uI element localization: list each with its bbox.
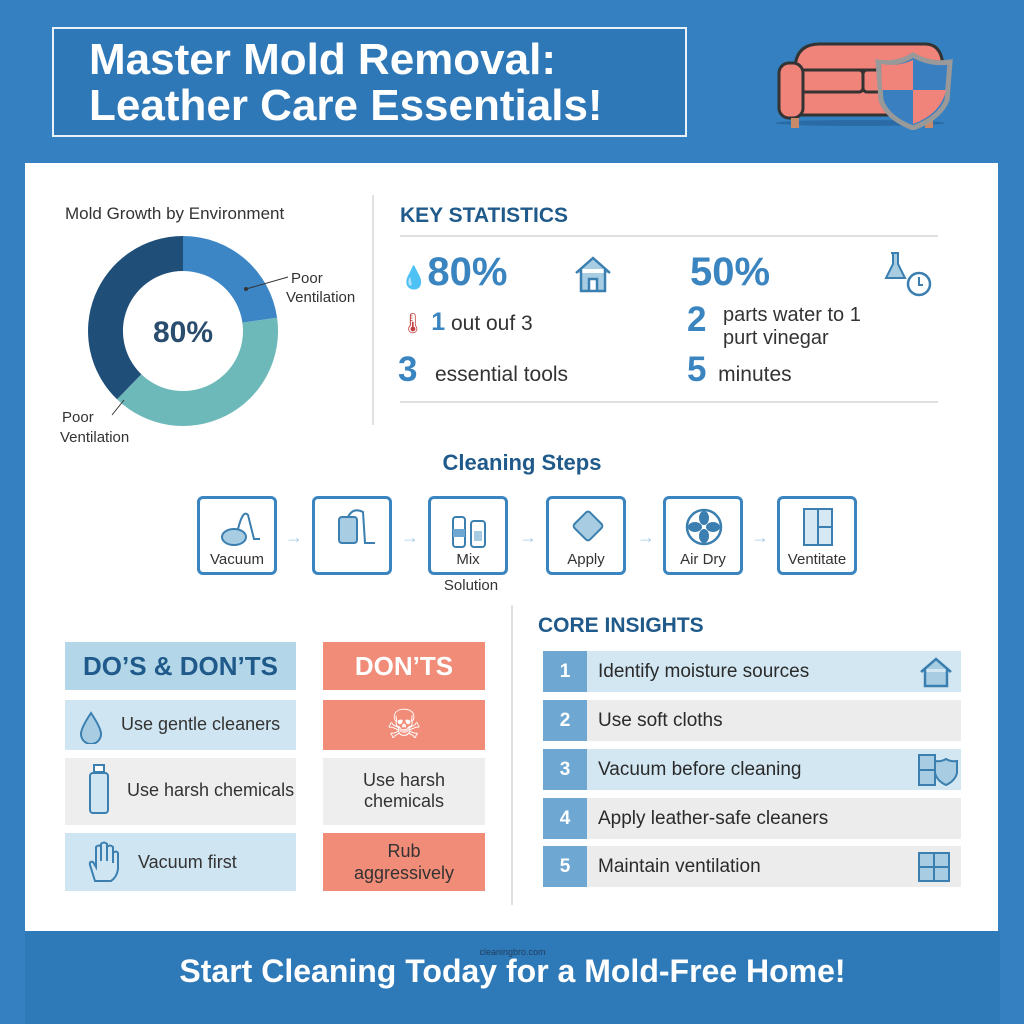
text: → [751,527,769,547]
donut chart [60,236,355,446]
step: apply [546,496,626,575]
insight 3 [543,749,961,790]
dont: rub: Rub [387,841,421,861]
step: air dry: Air Dry [680,551,726,568]
watermark: cleaningbro.com [479,947,546,957]
dont: harsh chemicals [323,758,485,825]
stat: 3 tools: 3 essential tools [398,350,568,389]
dos header [65,642,296,690]
step: apply: Apply [567,551,605,568]
dont: rub [323,833,485,891]
footer text: Start Cleaning Today for a Mold-Free Home! [179,953,846,989]
do: gentle cleaners: Use gentle cleaners [121,714,280,734]
do: harsh chemicals [65,758,296,825]
heading: cleaning steps: Cleaning Steps [443,450,601,475]
icon: skull: ☠ [386,703,422,747]
panel: key statistics [398,204,938,403]
insight 5: 5 [560,856,570,877]
insight 3: 3 [560,759,570,780]
donut chart: Poor [291,270,323,287]
icon: house [575,256,611,292]
icon: flask clock [884,252,932,296]
text: → [519,527,537,547]
insight 2: 2 [560,710,570,731]
stat: 50%: 50% [690,250,770,294]
insight 2 [543,700,961,741]
donut chart: Ventilation [286,289,355,306]
insight 3: Vacuum before cleaning [598,759,802,780]
step: mix solution [428,496,508,575]
insight 4 [543,798,961,839]
insight 5: Maintain ventilation [598,856,761,877]
donut chart: Poor [62,409,94,426]
heading: KEY STATISTICS [400,204,568,227]
step: mix solution: Mix [456,551,480,568]
step: vacuum: Vacuum [210,551,264,568]
stat: 80%: 💧80% [400,250,507,294]
donts header [323,642,485,690]
panel: key statistics: purt vinegar [723,327,829,349]
insight 1: 1 [560,661,570,682]
icon: skull [323,700,485,750]
title text [89,35,603,130]
title box [52,27,687,137]
insight 5 [543,846,961,887]
dont: harsh chemicals: chemicals [364,791,444,811]
insight 1: Identify moisture sources [598,661,809,682]
step: air dry [663,496,743,575]
insight 4: Apply leather-safe cleaners [598,808,828,829]
dos header: DO’S & DON’TS [83,651,278,681]
insight 2: Use soft cloths [598,710,723,731]
do: vacuum first [65,833,296,891]
insight 4: 4 [560,808,570,829]
panel: key statistics: parts water to 1 [723,304,861,326]
heading: CORE INSIGHTS [538,614,704,637]
donut chart: Ventilation [60,429,129,446]
dont: rub: aggressively [354,863,454,883]
title text: Master Mold Removal: [89,35,556,84]
stat: 1 out of 3: 🌡 1 out ouf 3 [400,308,533,336]
panel: donts [323,642,485,891]
text: Solution [444,577,498,594]
icon: sofa with shield [775,42,953,130]
donut chart: 80% [153,316,213,349]
main white panel [25,163,998,931]
step: vacuum 2 [312,496,392,575]
step: ventilate [777,496,857,575]
title text: Leather Care Essentials! [89,81,603,130]
text: → [637,527,655,547]
footer band [25,931,1000,1024]
do: harsh chemicals: Use harsh chemicals [127,780,294,800]
step: ventilate: Ventitate [788,551,846,568]
dont: harsh chemicals: Use harsh [363,770,445,790]
stat: 5 minutes: 5 minutes [687,350,792,389]
insight 1 [543,651,961,692]
donts header: DON’TS [355,651,453,681]
donut chart panel [60,204,355,446]
do: gentle cleaners [65,700,296,750]
chart title: Mold Growth by Environment [65,204,284,223]
step: vacuum [197,496,277,575]
stat: 2 parts water: 2 [687,300,706,339]
text: → [285,527,303,547]
text: → [401,527,419,547]
panel: dos [65,642,296,891]
do: vacuum first: Vacuum first [138,852,237,872]
